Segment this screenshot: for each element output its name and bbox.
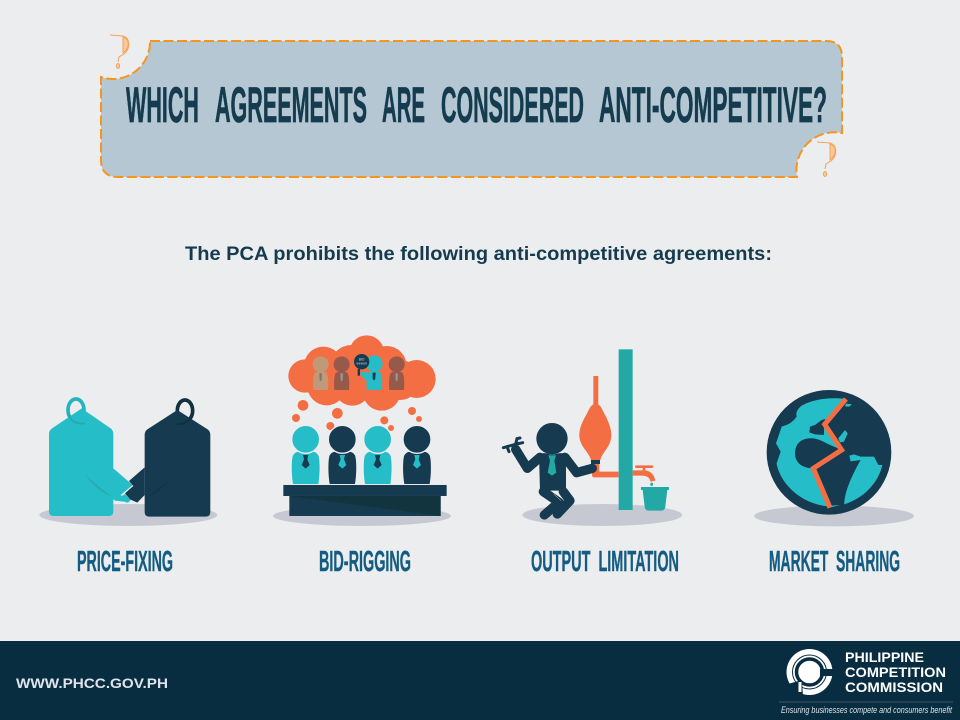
faucet (633, 465, 655, 482)
icon: market sharing globe (754, 390, 914, 526)
figure 3 (364, 425, 392, 484)
logo text: COMPETITION (845, 664, 946, 680)
navy hand (121, 467, 174, 503)
man with wrench (503, 423, 592, 515)
footer bar (0, 641, 960, 720)
logo text (845, 649, 946, 695)
text: BID-RIGGING (319, 546, 411, 578)
water drop (650, 483, 653, 486)
bucket (641, 487, 669, 511)
thought cloud (288, 335, 436, 411)
navy price tag (145, 400, 210, 517)
small teal coast (830, 404, 852, 508)
title text (126, 77, 827, 133)
bid sign: WINNER (356, 362, 367, 366)
title text: AGREEMENTS (215, 77, 367, 133)
pipe and bulb (579, 376, 619, 477)
icon: output limitation (503, 349, 682, 526)
logo mark (786, 649, 834, 697)
icon: price-fixing tags shaking hands (39, 399, 217, 526)
figure 1 (292, 425, 320, 484)
cloud figures (313, 354, 405, 390)
logo text: PHILIPPINE (845, 649, 924, 665)
text: PRICE-FIXING (77, 546, 173, 578)
small teal island (838, 430, 848, 442)
table (283, 485, 447, 516)
title text: ARE (382, 77, 425, 133)
icon: question mark top left (110, 35, 129, 68)
logo text: COMMISSION (845, 679, 943, 695)
crack (813, 399, 846, 508)
teal price tag (49, 399, 133, 516)
thought bubbles (292, 400, 422, 431)
wrench (503, 438, 523, 452)
teal pillar (619, 349, 633, 510)
icon: bid-rigging meeting (273, 335, 451, 526)
title text: CONSIDERED (441, 77, 584, 133)
bid sign (354, 354, 369, 376)
figure 4 (403, 425, 431, 484)
title text: WHICH (126, 77, 199, 133)
icon: question mark bottom right (817, 142, 836, 176)
left continent (776, 398, 845, 507)
website: WWW.PHCC.GOV.PH (16, 675, 168, 691)
dark inland sea (795, 438, 842, 468)
right continent (844, 454, 882, 504)
subtitle: The PCA prohibits the following anti-competitive agreements: (185, 243, 772, 265)
bid sign: BID (359, 358, 365, 362)
figure 2 (328, 425, 356, 484)
text: OUTPUT LIMITATION (531, 546, 679, 578)
title banner (101, 35, 842, 177)
dark island (809, 419, 825, 435)
